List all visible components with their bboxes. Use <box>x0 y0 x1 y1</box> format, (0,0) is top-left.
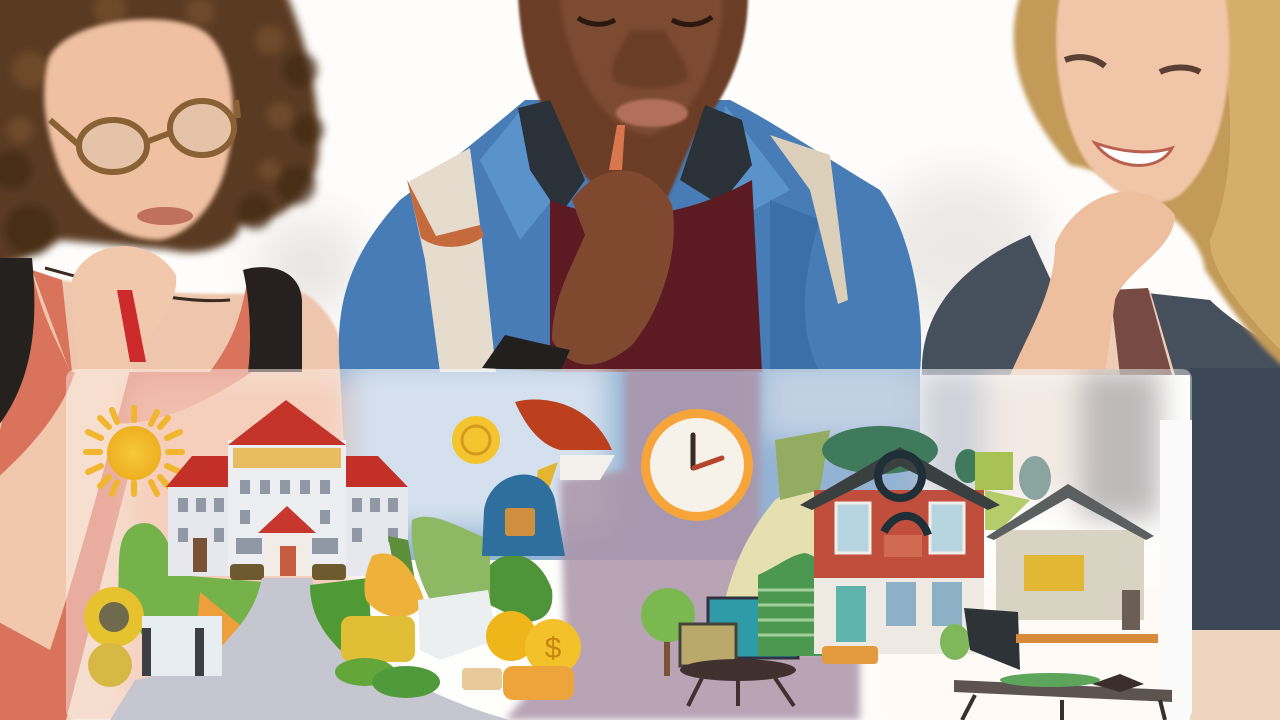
green block <box>758 553 834 656</box>
icon: gate left and gadget <box>84 587 240 687</box>
pencil <box>117 290 146 362</box>
jacket lower column <box>1190 368 1280 633</box>
inner chest <box>1040 290 1175 375</box>
hedges <box>230 564 264 580</box>
glasses <box>50 100 238 172</box>
tank top <box>0 270 252 720</box>
icon: gold pouch <box>364 553 424 617</box>
icon: laptop and table <box>680 598 798 706</box>
icon: red house <box>800 447 1000 654</box>
hair <box>1014 0 1280 372</box>
landscape behind house <box>725 426 1051 650</box>
icon: white box <box>418 590 497 660</box>
icon: bush by house <box>940 624 970 660</box>
hand <box>1010 192 1175 375</box>
icon: gold coins right: $ <box>545 632 562 665</box>
icon: coin top <box>452 416 500 464</box>
table <box>1190 630 1280 720</box>
smile <box>1095 143 1172 165</box>
hand <box>552 171 674 365</box>
face <box>44 19 233 240</box>
lips <box>616 99 688 127</box>
lips <box>137 207 193 225</box>
icon: grey house <box>986 484 1154 620</box>
icon: coin stacks <box>335 616 440 698</box>
straps <box>408 148 496 372</box>
jacket <box>922 235 1280 720</box>
neck and face <box>518 0 748 215</box>
side wings <box>168 484 408 576</box>
backpack strap left <box>0 258 34 430</box>
icon: monitor and desk <box>954 590 1172 720</box>
eyes <box>1065 57 1200 72</box>
necklace <box>45 268 230 301</box>
path <box>110 578 510 720</box>
icon: backpack and shoe <box>482 399 615 556</box>
hair <box>0 0 324 268</box>
orange bench <box>822 646 878 664</box>
bushes right <box>310 517 552 650</box>
upper windows <box>233 448 341 468</box>
icon: gold coins right <box>462 611 581 700</box>
bag dark <box>482 335 570 372</box>
mauve centre <box>505 369 860 720</box>
student right <box>922 0 1280 720</box>
pen <box>609 125 625 170</box>
eyes <box>578 17 712 25</box>
icon: clock <box>641 409 753 521</box>
illustration: campus building <box>118 400 408 646</box>
translucent panel <box>66 360 1200 720</box>
inner top <box>1110 288 1172 375</box>
student centre <box>339 0 921 560</box>
tree <box>641 588 695 676</box>
nose <box>612 30 688 89</box>
trees <box>118 523 265 646</box>
dark collar <box>518 100 752 215</box>
maroon sweater <box>550 180 762 372</box>
panel colour washes <box>128 369 1176 690</box>
white column <box>1160 420 1192 720</box>
hand and arm <box>0 246 176 650</box>
body skin <box>0 262 348 720</box>
face <box>1056 0 1229 203</box>
student left <box>0 0 348 720</box>
roofs <box>166 456 408 487</box>
shirt <box>339 100 921 560</box>
entrance <box>258 506 316 533</box>
icon: sun <box>86 408 182 494</box>
backpack strap right <box>243 267 302 372</box>
